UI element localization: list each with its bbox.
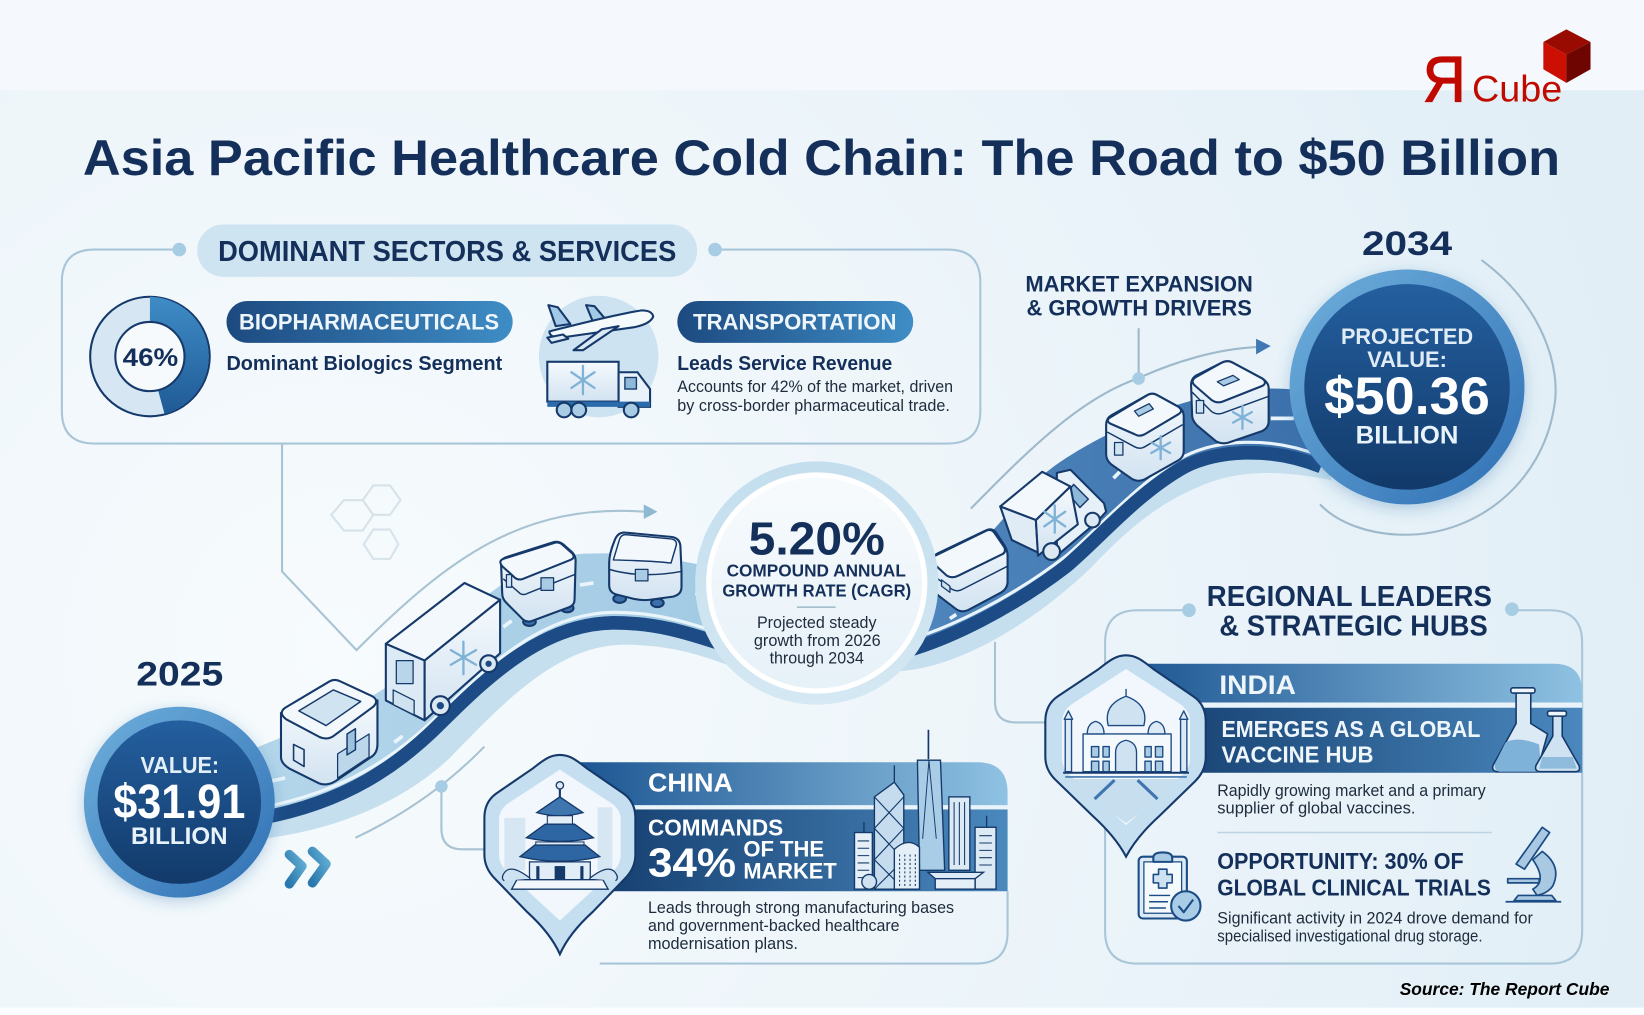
- banner: China: MARKET: [743, 859, 837, 884]
- road: [252, 388, 1332, 839]
- text: China description: [648, 899, 954, 953]
- callout: 2034 value: $50.36: [1324, 368, 1490, 426]
- callout: 2034 value: 2034: [1362, 225, 1453, 263]
- callout: 2025 value: 2025: [136, 656, 223, 694]
- badge: Taj Mahal: [1045, 655, 1206, 857]
- callout: 2025 value: $31.91: [113, 775, 245, 829]
- text: India description: Rapidly growing market and a primary: [1217, 782, 1487, 800]
- callout: CAGR: 5.20%: [749, 513, 885, 565]
- icon: snowflake on truck 1: [451, 642, 476, 674]
- text: opportunity: [1217, 848, 1533, 946]
- text: market expansion and growth drivers: MARKET EXPANSION: [1025, 272, 1253, 297]
- logo: RCube: Cube: [1472, 69, 1562, 110]
- callout: CAGR: through 2034: [770, 650, 864, 668]
- icon: snowflake on truck 2: [1044, 505, 1065, 533]
- cold box 4: [931, 529, 1008, 611]
- label: biopharmaceuticals: BIOPHARMACEUTICALS: [239, 309, 499, 334]
- text: China description: Leads through strong manufacturing bases: [648, 899, 954, 917]
- connector: road to China: [355, 747, 484, 849]
- cold box 3: [609, 533, 682, 607]
- text: opportunity: specialised investigational drug storage.: [1217, 928, 1483, 946]
- callout: 2025 value: BILLION: [131, 823, 228, 850]
- text: India description: supplier of global vaccines.: [1217, 800, 1415, 818]
- callout: 2034 value: VALUE:: [1367, 347, 1447, 372]
- callout: 2034 value: PROJECTED: [1341, 324, 1473, 349]
- cold box 2: [500, 542, 576, 626]
- callout: 2034 value: [1290, 225, 1556, 535]
- text: service revenue: [677, 353, 953, 415]
- text: biologics segment: Dominant Biologics Segment: [226, 352, 502, 375]
- connector arrow: sectors panel to road: [282, 444, 657, 650]
- icon: city skyline: [855, 730, 996, 889]
- callout: CAGR: GROWTH RATE (CAGR): [722, 581, 911, 601]
- growth arrow: upper right: [971, 328, 1271, 509]
- heading pill: DOMINANT SECTORS & SERVICES: [218, 235, 676, 267]
- text: opportunity: OPPORTUNITY: 30% OF: [1217, 848, 1464, 874]
- banner: China: COMMANDS: [648, 815, 783, 841]
- text: opportunity: Significant activity in 2024 drove demand for: [1217, 910, 1533, 928]
- source note: Source: The Report Cube: [1400, 979, 1609, 999]
- text: market expansion and growth drivers: [1025, 272, 1253, 321]
- logo: RCube: Я: [1423, 43, 1466, 116]
- text: service revenue: Leads Service Revenue: [677, 353, 892, 375]
- banner: India: INDIA: [1219, 669, 1296, 700]
- label: transportation: TRANSPORTATION: [693, 309, 896, 334]
- banner: India: VACCINE HUB: [1221, 741, 1373, 767]
- text: service revenue: Accounts for 42% of the market, driven: [677, 378, 953, 396]
- banner: India: EMERGES AS A GLOBAL: [1221, 716, 1480, 742]
- callout: 2025 value: [84, 656, 275, 898]
- heading: REGIONAL LEADERS: [1207, 580, 1492, 612]
- banner: China: 34%: [648, 840, 736, 886]
- callout: CAGR: Projected steady: [757, 614, 877, 632]
- text: China description: and government-backed healthcare: [648, 917, 900, 935]
- icon: clipboard with check: [1139, 852, 1200, 921]
- callout: CAGR: growth from 2026: [754, 632, 881, 650]
- heading: [1207, 580, 1492, 641]
- donut chart: 46%: 46%: [123, 344, 178, 372]
- text: China description: modernisation plans.: [648, 935, 798, 953]
- text: market expansion and growth drivers: & GROWTH DRIVERS: [1026, 296, 1252, 321]
- text: India description: [1217, 782, 1487, 818]
- cold box 7: [1191, 361, 1269, 443]
- callout: 2034 value: BILLION: [1356, 422, 1458, 450]
- label: transportation: [677, 301, 913, 343]
- callout: 2025 value: VALUE:: [140, 752, 219, 778]
- cold box 6: [1106, 394, 1184, 481]
- label: biopharmaceuticals: [226, 301, 513, 343]
- icon: double chevron: [289, 851, 326, 884]
- text: service revenue: by cross-border pharmaceutical trade.: [677, 397, 950, 415]
- connector: road to regional leaders: [995, 642, 1045, 722]
- logo: RCube: [1423, 29, 1591, 116]
- text: opportunity: GLOBAL CLINICAL TRIALS: [1217, 874, 1491, 900]
- badge: temple of heaven: [484, 755, 635, 954]
- title: Asia Pacific Healthcare Cold Chain: The Road to $50 Billion: [83, 129, 1560, 186]
- panel: China: [484, 730, 1008, 964]
- banner: China: OF THE: [743, 837, 824, 862]
- icon: lab flasks: [1493, 688, 1580, 772]
- icon: plane and truck: [539, 296, 658, 417]
- donut chart: 46%: [90, 297, 210, 416]
- banner: India: [1127, 664, 1582, 773]
- refrigerated truck 2: [1000, 470, 1106, 560]
- panel: regional leaders and strategic hubs: [1045, 580, 1582, 964]
- banner: China: CHINA: [648, 768, 733, 798]
- callout: CAGR: [695, 461, 938, 705]
- refrigerated truck 1: [386, 583, 500, 720]
- banner: China: [577, 762, 1008, 891]
- panel: dominant sectors and services: [62, 224, 980, 444]
- icon: microscope: [1506, 827, 1561, 902]
- callout: CAGR: COMPOUND ANNUAL: [727, 561, 906, 581]
- heading pill: [197, 224, 697, 277]
- cold box 1: [281, 680, 377, 784]
- heading: & STRATEGIC HUBS: [1219, 609, 1488, 641]
- decorative hexagon molecule: [331, 485, 401, 559]
